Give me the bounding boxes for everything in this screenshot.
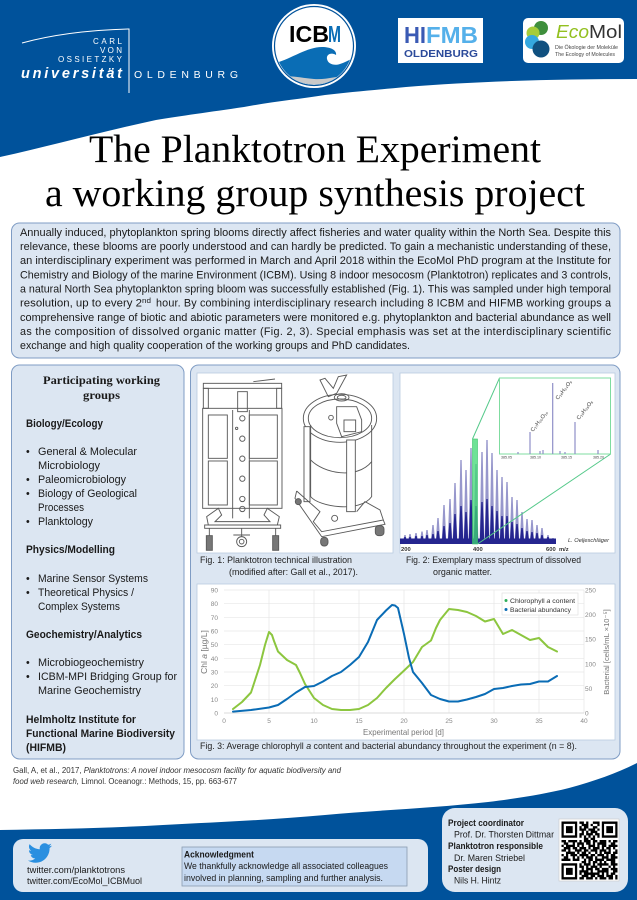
- logo: Universität Oldenburg: OLDENBURG: [134, 69, 238, 81]
- text: contacts: [448, 818, 555, 886]
- panel: introduction text: nd: [142, 298, 151, 305]
- section: biology and ecology: [26, 418, 137, 528]
- box: acknowledgment: We thankfully acknowledge all associated colleagues: [184, 861, 388, 872]
- section: biology and ecology: Biology of Geological: [38, 488, 137, 500]
- panel: introduction text: Chemistry and Biology of the marine Environment (ICBM). Using 8 indoor mesocosm (Planktotron) replicates and 3 controls,: [20, 270, 611, 282]
- axis: m/z labels: 600: [546, 547, 556, 553]
- logo: ICBM: [272, 4, 358, 90]
- section: biology and ecology: Planktology: [38, 516, 94, 528]
- section: biology and ecology: •: [26, 516, 30, 528]
- axis: bottom ticks: 30: [490, 718, 498, 725]
- icon: twitter bird: [28, 843, 52, 863]
- section: geochemistry and analytics: Marine Geochemistry: [38, 685, 142, 697]
- heading: participating working groups: Participating working: [43, 373, 160, 387]
- section: physics and modelling: •: [26, 573, 30, 585]
- text: contacts: Project coordinator: [448, 818, 524, 829]
- inset: zoomed mass spectrum: 385.05: [501, 456, 512, 460]
- section: geochemistry and analytics: [26, 629, 177, 697]
- section: HIFMB: [26, 714, 175, 754]
- logo: EcoMol: Die Ökologie der Moleküle: [555, 44, 618, 51]
- panel: introduction text: Annually induced, phytoplankton spring blooms directly affect fisheries and water quality within the North Sea. Despite this: [20, 227, 612, 239]
- axis: m/z labels: 400: [473, 547, 483, 553]
- citation: food web research, Limnol. Oceanogr.: Methods, 15, pp. 663-677: [13, 777, 238, 786]
- legend: Chlorophyll a content: [510, 598, 575, 605]
- logo: Universität Oldenburg: [21, 29, 238, 93]
- figure 3: line chart of chlorophyll and bacteria: [197, 584, 615, 740]
- title: [45, 128, 585, 215]
- axis: bottom ticks: 20: [400, 718, 408, 725]
- panel: introduction text: relevance, these blooms are poorly understood and can hardly be predicted. To gain a mechanistic understanding of these,: [20, 241, 611, 253]
- axis: right ticks: 100: [585, 661, 596, 668]
- text: contacts: Planktotron responsible: [448, 841, 543, 852]
- panel: participating working groups: [12, 365, 184, 759]
- drawing: front view of mesocosm: [203, 379, 282, 550]
- panel: introduction text: hour. By combining interdisciplinary research including 8 ICBM and HIFMB working groups a: [156, 298, 611, 310]
- box: acknowledgment: [182, 847, 407, 886]
- line: bacterial abundance: [233, 605, 557, 712]
- caption: figure 1: Fig. 1: Planktotron technical illustration: [200, 554, 352, 565]
- logo: EcoMol: Eco: [556, 22, 589, 42]
- axis: right ticks: 50: [585, 686, 593, 693]
- inset: zoomed mass spectrum: C₁₉H₂₈O₈: [576, 399, 595, 421]
- axis: bottom ticks: 15: [355, 718, 363, 725]
- panel: figures background: [190, 365, 620, 759]
- header: blue wave band: [0, 0, 637, 157]
- axis: left ticks: 80: [211, 601, 218, 608]
- section: physics and modelling: Marine Sensor Systems: [38, 573, 148, 585]
- section: geochemistry and analytics: Geochemistry/Analytics: [26, 629, 142, 641]
- section: physics and modelling: Theoretical Physics /: [38, 587, 134, 599]
- box: acknowledgment: Acknowledgment: [184, 850, 255, 860]
- axis: left ticks: 20: [211, 683, 218, 690]
- axis: bottom ticks: 25: [445, 718, 453, 725]
- axis: bottom ticks: 0: [222, 718, 226, 725]
- logo: ICBM: M: [328, 21, 341, 47]
- axis: m/z labels: [401, 547, 569, 553]
- text: twitter links: [27, 865, 142, 887]
- text: contacts: Nils H. Hintz: [454, 876, 501, 886]
- axis: left ticks: 70: [211, 615, 218, 622]
- inset: zoomed mass spectrum: 385.10: [530, 456, 541, 460]
- inset: zoomed mass spectrum: 385.20: [593, 456, 604, 460]
- panel: introduction text: resolution, up to every 2: [20, 298, 142, 310]
- axis: bottom ticks: 40: [580, 718, 588, 725]
- inset: zoomed mass spectrum: 385.15: [561, 456, 572, 460]
- section: physics and modelling: •: [26, 587, 30, 599]
- section: geochemistry and analytics: •: [26, 671, 30, 683]
- section: biology and ecology: •: [26, 474, 30, 486]
- axis: right ticks: 200: [585, 612, 596, 619]
- axis: left ticks: 60: [211, 628, 218, 636]
- panel: introduction text: an interdisciplinary experiment was performed in March and April 2018 within the EcoMol PhD program at the Institute for: [20, 255, 611, 267]
- axis: m/z labels: m/z: [559, 547, 569, 553]
- caption: figure 2: organic matter.: [433, 566, 492, 577]
- panel: introduction text: as the composition of dissolved organic matter (Fig. 2, 3). Special emphasis was set at the interdisciplinary scientific: [20, 326, 612, 338]
- axis: bottom ticks: 5: [267, 718, 271, 725]
- text: contacts: Dr. Maren Striebel: [454, 853, 525, 864]
- logo: EcoMol: Mol: [589, 22, 622, 42]
- logo: Universität Oldenburg: VON: [100, 46, 122, 55]
- section: HIFMB: Functional Marine Biodiversity: [26, 728, 175, 740]
- logo: Universität Oldenburg: CARL: [93, 37, 123, 46]
- caption: figure 3: Fig. 3: Average chlorophyll a content and bacterial abundancy throughout the experiment (n = 8).: [200, 740, 577, 751]
- logo: EcoMol: [523, 18, 624, 63]
- chart: light peaks: [403, 440, 555, 544]
- section: geochemistry and analytics: Microbiogeochemistry: [38, 657, 145, 669]
- figure 2: mass spectrum: [400, 373, 615, 553]
- section: biology and ecology: Processes: [38, 502, 84, 514]
- section: biology and ecology: Microbiology: [38, 460, 101, 472]
- axis: bottom ticks: 10: [310, 718, 318, 725]
- title: a working group synthesis project: [45, 172, 585, 215]
- section: biology and ecology: Biology/Ecology: [26, 418, 103, 430]
- line: chlorophyll a: [233, 609, 557, 710]
- panel: contacts and QR code: [442, 808, 628, 892]
- section: physics and modelling: Complex Systems: [38, 601, 120, 613]
- panel: introduction text: comprehensive range of biotic and abiotic parameters were monitored e.g. phytoplankton and bacterial abundance as well: [20, 312, 611, 324]
- text: contacts: Poster design: [448, 864, 501, 875]
- caption: figure 1: (modified after: Gall et al., 2017).: [229, 566, 358, 577]
- axis: left ticks: 40: [211, 656, 218, 663]
- logo: HIFMB Oldenburg: HI: [404, 22, 426, 48]
- highlight: selected mass range: [472, 439, 478, 544]
- axis: left ticks: [211, 588, 218, 718]
- caption: figure 2: Fig. 2: Exemplary mass spectrum of dissolved: [406, 554, 581, 565]
- logo: Universität Oldenburg: OSSIETZKY: [58, 55, 123, 64]
- heading: participating working groups: [43, 373, 160, 402]
- axis: left ticks: 0: [214, 710, 218, 718]
- logo: EcoMol: The Ecology of Molecules: [555, 52, 615, 58]
- section: HIFMB: Helmholtz Institute for: [26, 714, 136, 726]
- section: geochemistry and analytics: ICBM-MPI Bridging Group for: [38, 671, 177, 683]
- inset: zoomed mass spectrum: [472, 378, 611, 544]
- chart: dark peaks: [403, 499, 555, 544]
- axis: bottom ticks: 35: [535, 718, 543, 725]
- axis: m/z labels: 200: [401, 547, 411, 553]
- logo: Universität Oldenburg: universität: [21, 66, 123, 82]
- panel: introduction text: a natural North Sea phytoplankton spring bloom was successfully established (Fig. 1). This was sampled under high temporal: [20, 284, 611, 296]
- citation: Gall, A, et al., 2017, Planktotrons: A novel indoor mesocosm facility for aquatic biodiversity and: [13, 766, 342, 775]
- box: acknowledgment: involved in planning, sampling and further analysis.: [184, 873, 383, 884]
- citation: [13, 766, 342, 786]
- section: biology and ecology: General & Molecular: [38, 446, 137, 458]
- axis: right ticks: 250: [585, 588, 596, 594]
- axis title: chlorophyll: Chl a [µg/L]: [199, 630, 209, 674]
- text: contacts: Prof. Dr. Thorsten Dittmar: [454, 830, 555, 840]
- axis: left ticks: 90: [211, 588, 218, 594]
- section: physics and modelling: [26, 544, 148, 613]
- panel: introduction text: [12, 223, 620, 358]
- logo: HIFMB Oldenburg: FMB: [426, 22, 478, 48]
- heading: participating working groups: groups: [83, 388, 120, 402]
- figure 1: Planktotron technical illustration: [197, 373, 393, 553]
- panel: social links and acknowledgment: [13, 839, 428, 892]
- axis: left ticks: 30: [211, 670, 218, 676]
- panel: introduction text: exchange and high quality cooperation of the working groups and PhD candidates.: [20, 340, 410, 352]
- title: The Planktotron Experiment: [89, 128, 541, 171]
- logo: HIFMB Oldenburg: [398, 18, 483, 63]
- section: geochemistry and analytics: •: [26, 657, 30, 669]
- legend: Bacterial abundancy: [510, 607, 572, 614]
- axis: right ticks: [585, 588, 596, 718]
- logo: HIFMB Oldenburg: OLDENBURG: [404, 48, 478, 60]
- text: twitter links: twitter.com/planktotrons: [27, 865, 125, 876]
- QR code: [559, 819, 619, 881]
- footer: blue wave band: [0, 763, 637, 900]
- axis title: experimental period: Experimental period [d]: [363, 727, 444, 737]
- drawing: perspective view of mesocosm: [295, 375, 385, 546]
- axis: bottom ticks: [222, 718, 588, 725]
- logo: ICBM: ICB: [289, 21, 329, 47]
- section: biology and ecology: Paleomicrobiology: [38, 474, 127, 486]
- axis: right ticks: 0: [585, 710, 589, 718]
- section: physics and modelling: Physics/Modelling: [26, 544, 115, 556]
- axis title: bacterial: Bacterial [cells/mL ×10⁻⁵]: [602, 609, 611, 695]
- caption: figure 1: [200, 554, 358, 577]
- inset: zoomed mass spectrum: C₁₇H₂₀O₁₀: [530, 410, 550, 433]
- axis: left ticks: 50: [211, 642, 218, 649]
- inset: zoomed mass spectrum: C₁₈H₂₄O₉: [555, 379, 574, 401]
- section: biology and ecology: •: [26, 488, 30, 500]
- axis: left ticks: 10: [211, 697, 218, 704]
- caption: figure 2: [406, 554, 581, 577]
- text: twitter links: twitter.com/EcoMol_ICBMuol: [27, 876, 142, 887]
- section: biology and ecology: •: [26, 446, 30, 458]
- legend: [502, 593, 578, 615]
- credit: L. Oeljeschläger: L. Oeljeschläger: [568, 538, 610, 544]
- axis: right ticks: 150: [585, 637, 596, 644]
- section: HIFMB: (HIFMB): [26, 742, 66, 754]
